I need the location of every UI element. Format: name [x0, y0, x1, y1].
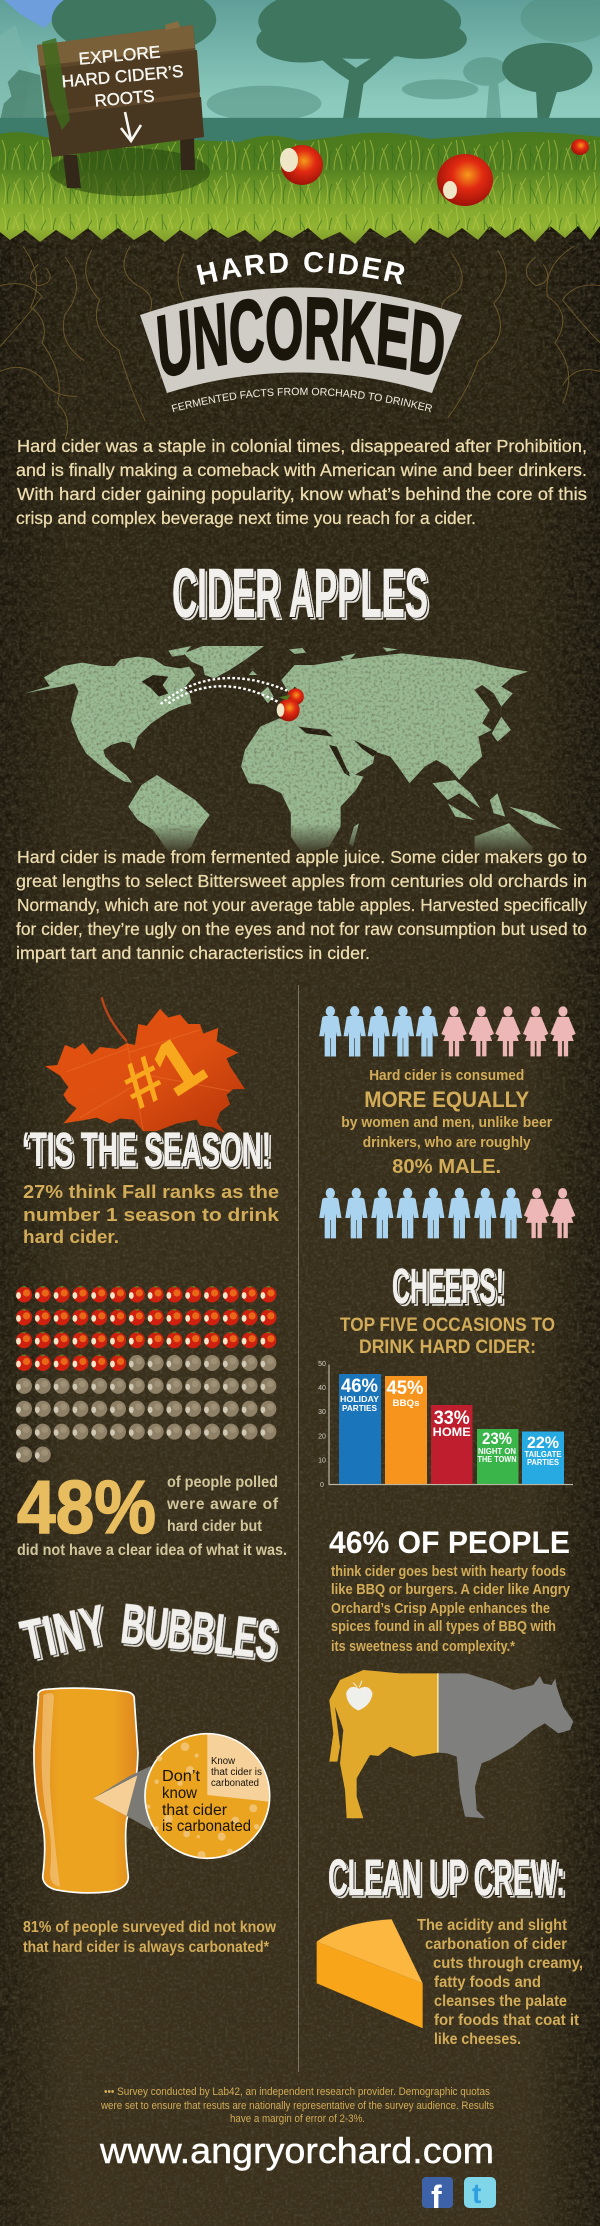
- icon: red apples on Normandy: [277, 688, 304, 721]
- pie label: don't know: that cider: [162, 1802, 228, 1819]
- sign text: ROOTS: [94, 86, 155, 111]
- stat: 48 percent: hard cider but: [167, 1518, 262, 1535]
- wooden sign: [37, 21, 204, 157]
- bar: BBQs: BBQs: [392, 1398, 420, 1409]
- BBQ text: like BBQ or burgers. A cider like Angry: [331, 1581, 571, 1598]
- icon: white apple on cow: [347, 1681, 372, 1710]
- carbonation text: 81% of people surveyed did not know: [23, 1919, 276, 1936]
- gender text: MORE EQUALLY: [364, 1087, 529, 1112]
- gender text: 80% MALE.: [392, 1156, 501, 1178]
- panel: glass and pie chart: [34, 1688, 270, 1893]
- pie label: know: carbonated: [211, 1778, 259, 1789]
- gender text: by women and men, unlike beer: [341, 1114, 552, 1131]
- bar: holiday parties: [339, 1374, 381, 1484]
- cheese text: for foods that coat it: [434, 2012, 580, 2029]
- intro text: [16, 436, 587, 528]
- chart title: DRINK HARD CIDER:: [359, 1336, 536, 1358]
- stat: 48 percent: did not have a clear idea of what it was.: [17, 1542, 287, 1559]
- pie label: don't know: Don’t: [162, 1768, 201, 1785]
- map overlays: [161, 678, 304, 721]
- chart title: [340, 1314, 555, 1358]
- cider apples text: great lengths to select Bittersweet apples from centuries old orchards in: [16, 871, 587, 891]
- survey footnote: have a margin of error of 2-3%.: [230, 2113, 365, 2125]
- orchard tree silhouettes: [0, 0, 600, 143]
- apple pictogram: 48 of 100: [16, 1286, 276, 1462]
- heading: 46 percent of people: 46% OF PEOPLE: [329, 1524, 570, 1560]
- axis labels: 10: [318, 1458, 326, 1464]
- arrows: dotted routes to Normandy: [161, 678, 287, 704]
- sky: [0, 0, 600, 136]
- icon: cider glass: [34, 1688, 138, 1893]
- column divider: [298, 985, 299, 2072]
- cheese text: [417, 1917, 583, 2048]
- survey footnote: [100, 2086, 494, 2125]
- chart title: TOP FIVE OCCASIONS TO: [340, 1314, 555, 1336]
- icon: cheese wedge: [317, 1919, 423, 2028]
- leaf number: #: [109, 1041, 176, 1123]
- callout wedge: [93, 1766, 152, 1830]
- panel: orchard scene: [0, 0, 600, 244]
- bar: night on the town: [477, 1429, 518, 1484]
- panel: world map: [25, 646, 563, 855]
- stat: 48 percent: [17, 1465, 287, 1559]
- bar: night on the town: 23%: [482, 1429, 512, 1448]
- bitten apples in the grass: [280, 139, 589, 206]
- pie label: don't know: [162, 1768, 251, 1835]
- website url: www.angryorchard.com: [99, 2130, 494, 2171]
- chart axes: [329, 1364, 573, 1484]
- sign text: EXPLORE: [78, 42, 161, 69]
- axis labels: 50: [318, 1361, 326, 1368]
- pie label: know: Know: [211, 1756, 236, 1767]
- title plate: Uncorked: UNCORKED: [156, 296, 444, 376]
- map: inland waters: [142, 675, 377, 777]
- tagline: FERMENTED FACTS FROM ORCHARD TO DRINKER: [172, 388, 432, 412]
- gender text: Hard cider is consumed: [369, 1067, 524, 1084]
- cider apples text: for cider, they’re ugly on the eyes and not for raw consumption but used to: [16, 919, 587, 939]
- bar: home: [431, 1405, 472, 1484]
- blue sky patch: [4, 0, 87, 28]
- gender text: [341, 1067, 552, 1178]
- gender text: drinkers, who are roughly: [363, 1134, 531, 1151]
- BBQ text: [331, 1563, 571, 1655]
- heading: Tiny Bubbles: [15, 1592, 281, 1673]
- cider apples text: Hard cider is made from fermented apple juice. Some cider makers go to: [17, 847, 587, 867]
- bar: night on the town: THE TOWN: [478, 1455, 517, 1464]
- intro text: crisp and complex beverage next time you reach for a cider.: [16, 508, 476, 528]
- bar: tailgate parties: TAILGATE: [524, 1450, 562, 1459]
- icon: facebook: f: [431, 2179, 442, 2215]
- icon: facebook: [422, 2177, 453, 2215]
- survey footnote: ••• Survey conducted by Lab42, an independent research provider. Demographic quotas: [104, 2086, 490, 2098]
- leaf number: 1: [138, 1019, 218, 1111]
- bar: tailgate parties: [522, 1432, 564, 1484]
- carbonation text: that hard cider is always carbonated*: [23, 1939, 270, 1956]
- pie label: don't know: know: [162, 1785, 197, 1802]
- icon: twitter: t: [472, 2178, 481, 2209]
- bar: tailgate parties: PARTIES: [527, 1458, 560, 1467]
- leaf number: [109, 1019, 218, 1123]
- cider apples text: [16, 847, 587, 963]
- pie label: don't know: is carbonated: [162, 1818, 251, 1835]
- cow: gold half: [329, 1670, 438, 1818]
- icon: twitter: [464, 2177, 496, 2209]
- bar: home: 33%: [434, 1408, 470, 1429]
- icon: cow silhouette: [329, 1670, 573, 1818]
- season text: number 1 season to drink: [23, 1205, 280, 1225]
- stat: 48 percent: were aware of: [166, 1496, 279, 1513]
- bar: home: HOME: [433, 1425, 471, 1439]
- icon: down arrow on sign: [121, 112, 141, 141]
- season text: [23, 1182, 280, 1247]
- sign posts: [63, 138, 195, 188]
- tree roots under the soil: [0, 246, 600, 439]
- bar: holiday parties: HOLIDAY: [340, 1394, 379, 1404]
- axis labels: 0: [320, 1482, 324, 1489]
- BBQ text: its sweetness and complexity.*: [331, 1638, 515, 1655]
- intro text: Hard cider was a staple in colonial times, disappeared after Prohibition,: [17, 436, 587, 456]
- bar: BBQs: [385, 1376, 427, 1484]
- grass blades: [0, 140, 600, 230]
- intro text: and is finally making a comeback with American wine and beer drinkers.: [16, 460, 587, 480]
- cider apples text: impart tart and tannic characteristics in cider.: [16, 943, 370, 963]
- cheese text: carbonation of cider: [425, 1936, 567, 1953]
- panel: gender pictograms: [320, 1007, 575, 1238]
- grass field: [0, 132, 600, 244]
- axis labels: 40: [318, 1385, 326, 1392]
- cheese text: cleanses the palate: [434, 1993, 567, 2010]
- heading: Tis the season: ‘TIS THE SEASON!: [22, 1124, 271, 1177]
- intro text: With hard cider gaining popularity, know what’s behind the core of this: [17, 484, 587, 504]
- cheese text: The acidity and slight: [417, 1917, 568, 1934]
- axis labels: [318, 1361, 326, 1489]
- season text: hard cider.: [23, 1227, 119, 1247]
- pictogram: beer drinkers: [320, 1189, 575, 1238]
- sign text: [61, 42, 184, 111]
- BBQ text: spices found in all types of BBQ with: [331, 1618, 556, 1635]
- stat: 48 percent: of people polled: [167, 1474, 278, 1491]
- heading: Tiny Bubbles: BUBBLES: [118, 1592, 281, 1672]
- cider apples text: Normandy, which are not your average table apples. Harvested specifically: [17, 895, 587, 915]
- cheese text: cuts through creamy,: [433, 1955, 583, 1972]
- bar: tailgate parties: 22%: [527, 1433, 559, 1452]
- bar: night on the town: NIGHT ON: [478, 1447, 516, 1456]
- bar: holiday parties: PARTIES: [342, 1403, 377, 1413]
- survey footnote: were set to ensure that resuts are nationally representative of the survey audience. Results: [100, 2100, 494, 2112]
- stat: 48 percent: 48%: [17, 1465, 156, 1549]
- cheese text: fatty foods and: [434, 1974, 541, 1991]
- sign text: HARD CIDER’S: [61, 62, 184, 91]
- pie chart: [145, 1734, 270, 1859]
- cow: grey half: [438, 1673, 573, 1818]
- heading: Tiny Bubbles: TINY: [15, 1593, 112, 1673]
- axis labels: 20: [318, 1434, 326, 1440]
- bar: BBQs: 45%: [386, 1378, 424, 1399]
- icon: autumn leaf: [45, 997, 245, 1133]
- shadow under sign: [50, 148, 210, 196]
- map: continents: [25, 646, 563, 855]
- bar chart: occasions: [318, 1361, 573, 1489]
- season text: 27% think Fall ranks as the: [23, 1182, 279, 1202]
- cheese text: like cheeses.: [434, 2031, 521, 2048]
- pictogram: cider drinkers: [320, 1007, 575, 1056]
- carbonation text: [23, 1919, 276, 1956]
- panel: the season: [22, 997, 280, 1247]
- bar: holiday parties: 46%: [341, 1376, 378, 1397]
- pie label: know: [211, 1756, 262, 1789]
- BBQ text: Orchard’s Crisp Apple enhances the: [331, 1600, 550, 1617]
- axis labels: 30: [318, 1409, 326, 1416]
- pie label: know: that cider is: [211, 1767, 262, 1778]
- title: Hard Cider: HARD CIDER: [196, 252, 404, 285]
